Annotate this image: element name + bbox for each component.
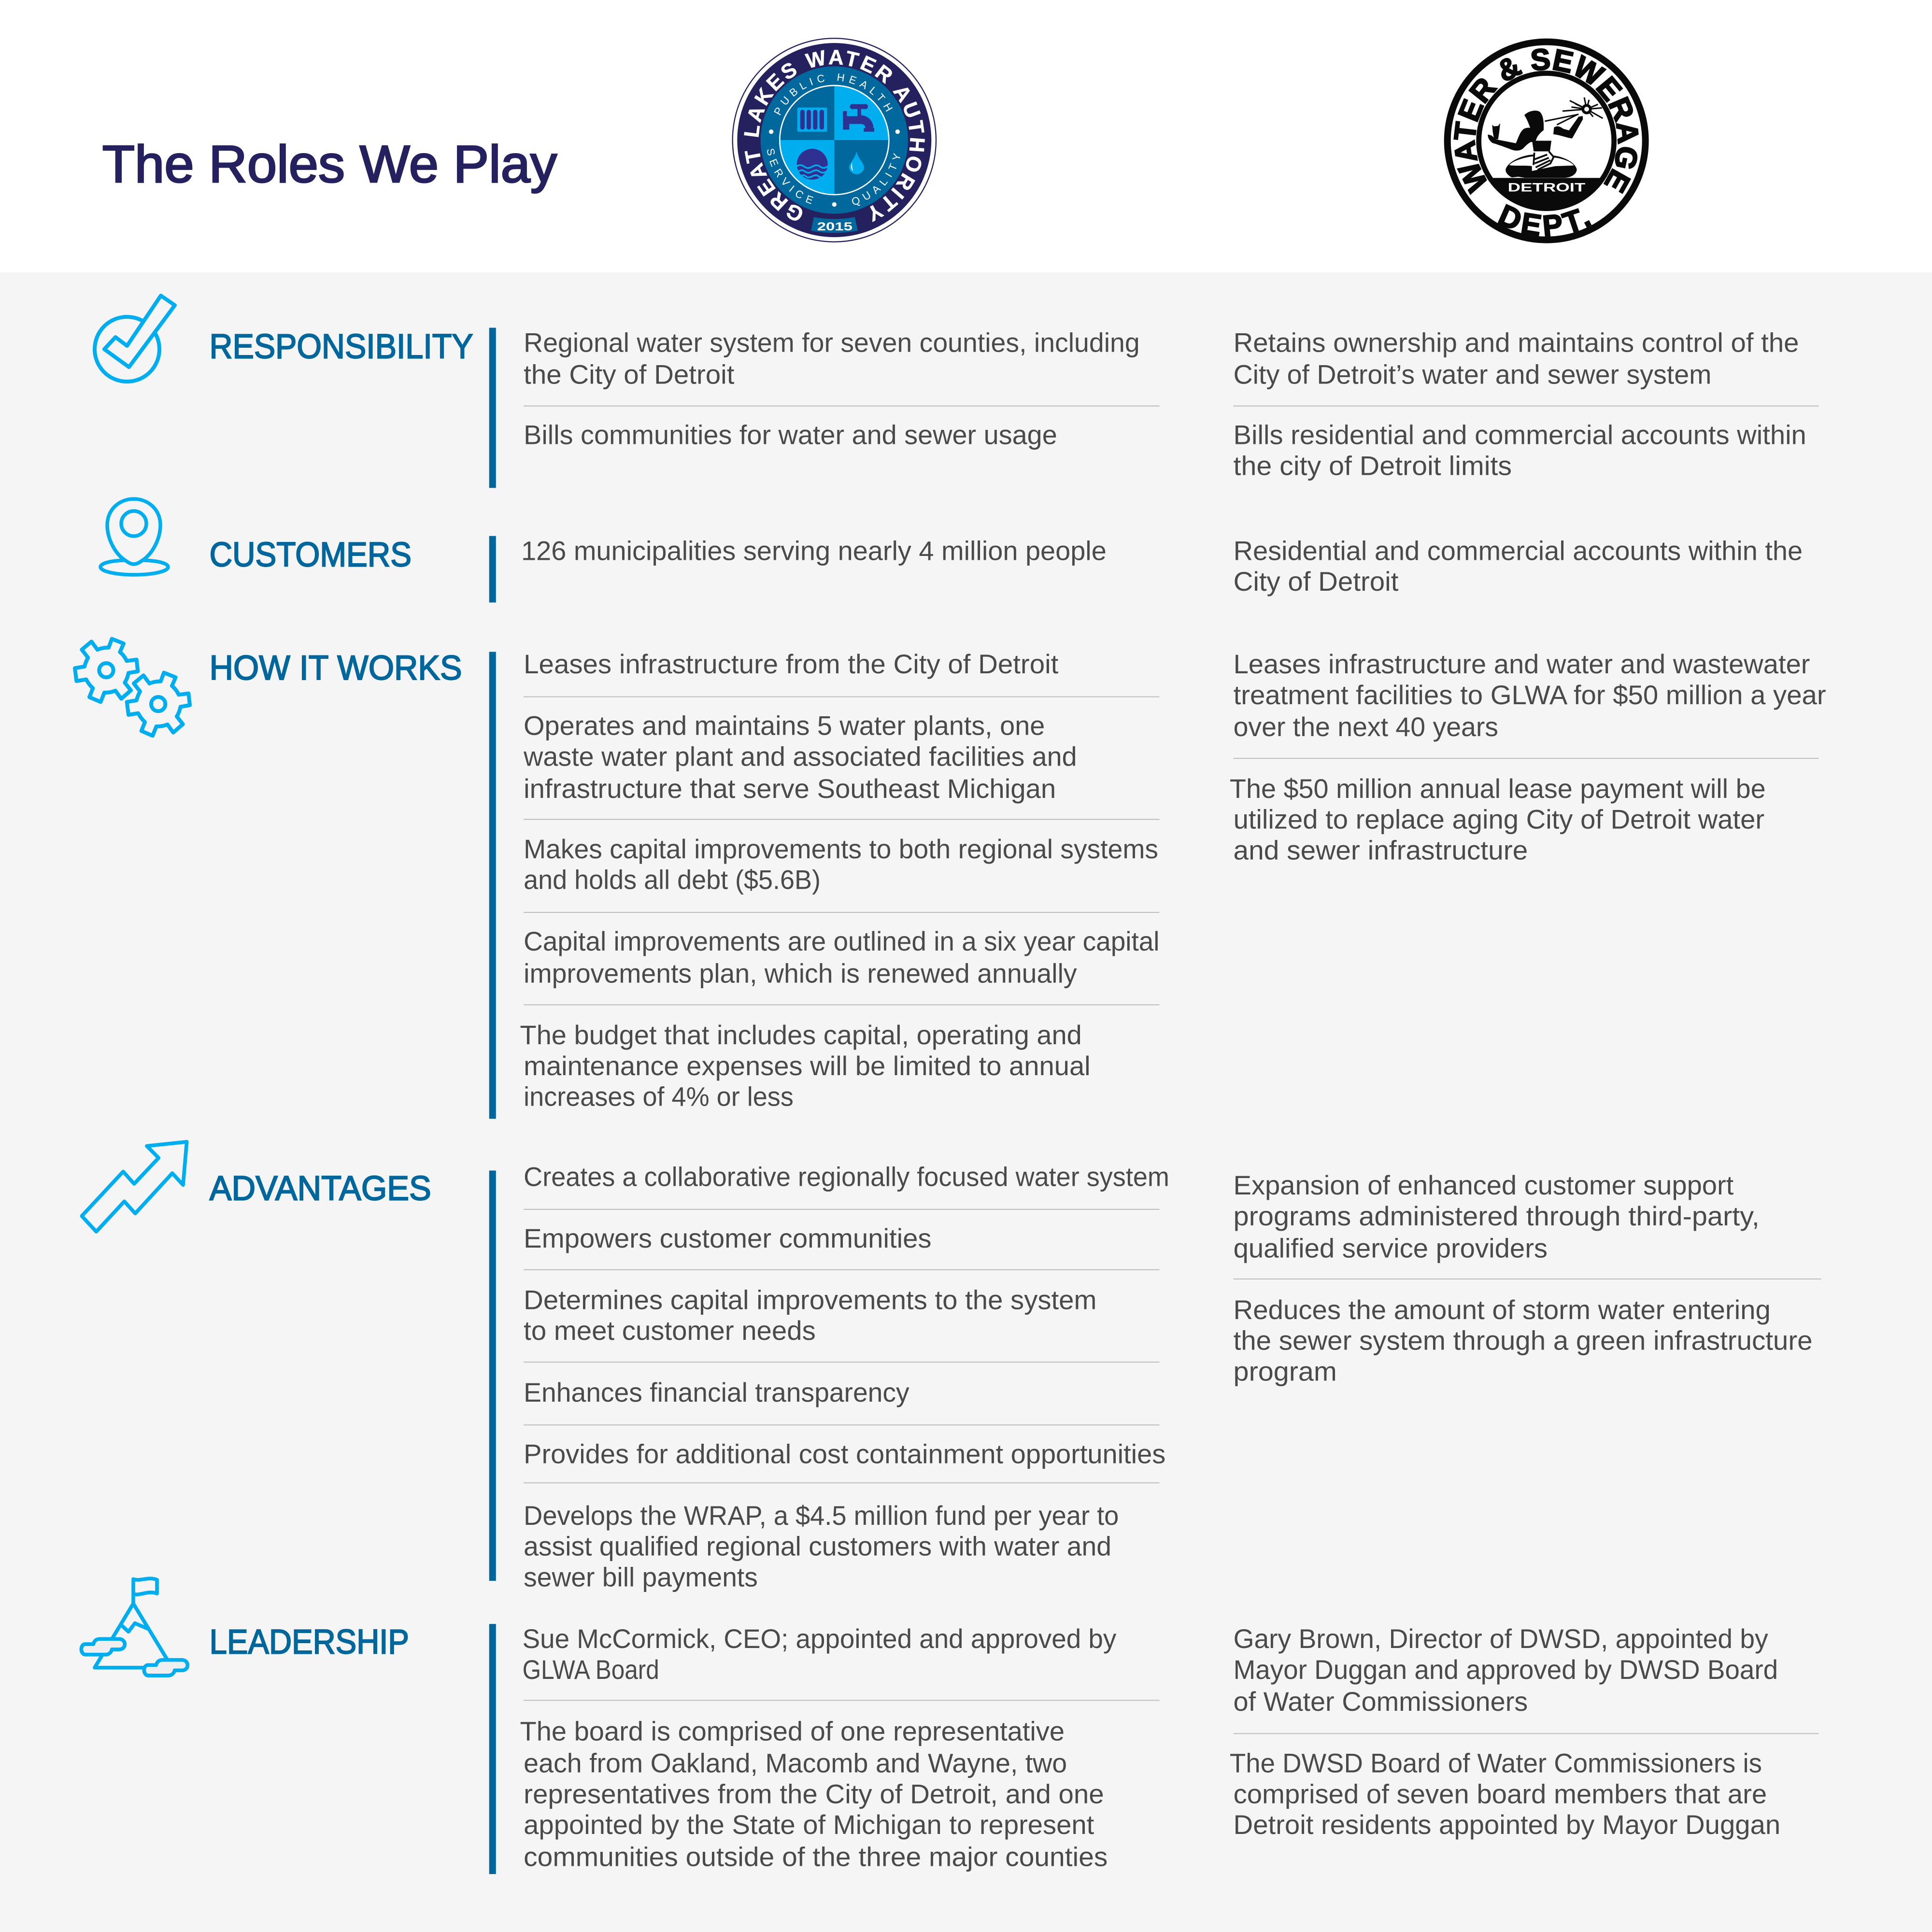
text block: how it works DWSD: over the next 40 years bbox=[1234, 712, 1498, 742]
text block: leadership GLWA: communities outside of the three major counties bbox=[524, 1842, 1108, 1872]
text block: advantages GLWA: sewer bill payments bbox=[524, 1562, 758, 1592]
text block: leadership DWSD: of Water Commissioners bbox=[1234, 1687, 1528, 1717]
text block: leadership GLWA: Sue McCormick, CEO; appointed and approved by bbox=[523, 1624, 1116, 1654]
text block: advantages GLWA: Develops the WRAP, a $4.5 million fund per year to bbox=[524, 1501, 1119, 1531]
text block: advantages DWSD: programs administered through third-party, bbox=[1234, 1201, 1760, 1231]
text block: how it works GLWA: waste water plant and associated facilities and bbox=[523, 741, 1077, 771]
text block: how it works DWSD: utilized to replace aging City of Detroit water bbox=[1234, 805, 1764, 835]
text block: advantages DWSD: qualified service providers bbox=[1234, 1233, 1548, 1263]
divider bar: leadership bbox=[489, 1624, 496, 1874]
text block: customers DWSD: City of Detroit bbox=[1234, 567, 1399, 597]
text block: responsibility GLWA bbox=[524, 327, 1160, 450]
text block: advantages DWSD: program bbox=[1234, 1356, 1337, 1386]
text block: how it works GLWA: maintenance expenses will be limited to annual bbox=[524, 1051, 1091, 1081]
text block: customers DWSD: Residential and commercial accounts within the bbox=[1234, 536, 1803, 566]
text block: leadership GLWA bbox=[520, 1624, 1160, 1872]
text block: how it works GLWA: Operates and maintains 5 water plants, one bbox=[524, 711, 1045, 741]
heading: how it works: HOW IT WORKS bbox=[210, 649, 462, 687]
icon: gears bbox=[75, 639, 190, 736]
text block: leadership GLWA: appointed by the State of Michigan to represent bbox=[524, 1810, 1094, 1840]
text block: advantages DWSD: Reduces the amount of storm water entering bbox=[1234, 1295, 1771, 1325]
text block: how it works GLWA: The budget that includes capital, operating and bbox=[520, 1020, 1082, 1050]
text block: leadership GLWA: each from Oakland, Macomb and Wayne, two bbox=[524, 1748, 1067, 1778]
text block: advantages DWSD bbox=[1234, 1170, 1821, 1386]
text block: responsibility GLWA: Bills communities for water and sewer usage bbox=[524, 420, 1057, 450]
text block: advantages GLWA: Empowers customer communities bbox=[524, 1223, 932, 1253]
text block: advantages DWSD: Expansion of enhanced customer support bbox=[1234, 1170, 1734, 1200]
text block: how it works GLWA bbox=[520, 649, 1160, 1112]
text block: how it works DWSD: Leases infrastructure and water and wastewater bbox=[1234, 649, 1810, 679]
text block: leadership DWSD bbox=[1230, 1624, 1818, 1840]
heading: responsibility: RESPONSIBILITY bbox=[210, 327, 473, 366]
text block: advantages GLWA bbox=[524, 1162, 1169, 1592]
text block: leadership DWSD: comprised of seven board members that are bbox=[1234, 1779, 1767, 1809]
text block: responsibility DWSD bbox=[1234, 327, 1818, 481]
text block: how it works GLWA: Makes capital improvements to both regional systems bbox=[524, 834, 1158, 864]
text block: advantages GLWA: Creates a collaborative regionally focused water system bbox=[524, 1162, 1169, 1192]
text block: advantages GLWA: Enhances financial transparency bbox=[524, 1378, 909, 1407]
logo: Great Lakes Water Authority: GREAT LAKES WATER AUTHORITY bbox=[744, 50, 925, 222]
icon: check mark in circle bbox=[95, 296, 175, 382]
icon: map pin bbox=[100, 499, 168, 575]
text block: how it works DWSD: The $50 million annual lease payment will be bbox=[1230, 774, 1766, 804]
text block: customers GLWA: 126 municipalities serving nearly 4 million people bbox=[521, 536, 1107, 566]
text block: advantages GLWA: assist qualified regional customers with water and bbox=[524, 1532, 1111, 1562]
text block: leadership DWSD: The DWSD Board of Water Commissioners is bbox=[1230, 1748, 1762, 1778]
icon: Spirit of Detroit statue bbox=[1488, 98, 1603, 178]
text block: leadership DWSD: Detroit residents appointed by Mayor Duggan bbox=[1234, 1810, 1780, 1840]
icon: rising arrow bbox=[82, 1142, 187, 1232]
text block: advantages GLWA: Determines capital improvements to the system bbox=[524, 1285, 1096, 1315]
divider bar: responsibility bbox=[489, 328, 496, 488]
text block: responsibility GLWA: the City of Detroit bbox=[524, 360, 735, 390]
logo: Detroit Water and Sewerage Department: DEPT. bbox=[1497, 204, 1592, 237]
divider bar: customers bbox=[489, 536, 496, 602]
text block: responsibility DWSD: City of Detroit’s water and sewer system bbox=[1234, 360, 1711, 390]
text block: how it works GLWA: and holds all debt ($5.6B) bbox=[524, 865, 821, 895]
logo: Great Lakes Water Authority: QUALITY bbox=[852, 153, 900, 206]
text block: leadership DWSD: Gary Brown, Director of DWSD, appointed by bbox=[1234, 1624, 1768, 1654]
logo: Great Lakes Water Authority: 2015 bbox=[817, 220, 852, 233]
text block: responsibility DWSD: Bills residential and commercial accounts within bbox=[1234, 420, 1806, 450]
text block: advantages DWSD: the sewer system through a green infrastructure bbox=[1234, 1326, 1813, 1356]
icon: mountain with flag bbox=[81, 1578, 187, 1676]
text block: leadership GLWA: representatives from the City of Detroit, and one bbox=[524, 1779, 1104, 1809]
text block: leadership DWSD: Mayor Duggan and approved by DWSD Board bbox=[1234, 1655, 1778, 1685]
text block: how it works DWSD bbox=[1230, 649, 1826, 865]
text block: responsibility DWSD: the city of Detroit limits bbox=[1234, 451, 1512, 481]
text block: how it works GLWA: increases of 4% or less bbox=[524, 1082, 794, 1112]
text block: how it works GLWA: infrastructure that serve Southeast Michigan bbox=[524, 774, 1056, 804]
logo: Great Lakes Water Authority: PUBLIC HEALTH bbox=[774, 73, 893, 115]
text block: how it works GLWA: Leases infrastructure from the City of Detroit bbox=[524, 649, 1059, 679]
text block: how it works GLWA: improvements plan, which is renewed annually bbox=[524, 958, 1077, 988]
text block: advantages GLWA: Provides for additional cost containment opportunities bbox=[524, 1439, 1165, 1469]
title: The Roles We Play bbox=[102, 135, 557, 193]
text block: responsibility GLWA: Regional water system for seven counties, including bbox=[524, 327, 1140, 357]
text block: how it works GLWA: Capital improvements are outlined in a six year capital bbox=[524, 926, 1160, 956]
text block: leadership GLWA: The board is comprised of one representative bbox=[520, 1716, 1065, 1746]
divider bar: how it works bbox=[489, 652, 496, 1119]
text block: how it works DWSD: treatment facilities to GLWA for $50 million a year bbox=[1234, 680, 1826, 710]
logo: Detroit Water and Sewerage Department: DETROIT bbox=[1508, 181, 1586, 195]
logo: Detroit Water and Sewerage Department: WATER & SEWERAGE bbox=[1453, 48, 1639, 195]
text block: advantages GLWA: to meet customer needs bbox=[524, 1316, 816, 1346]
divider bar: advantages bbox=[489, 1170, 496, 1581]
heading: leadership: LEADERSHIP bbox=[210, 1622, 409, 1661]
heading: advantages: ADVANTAGES bbox=[210, 1169, 431, 1208]
logo: Great Lakes Water Authority: SERVICE bbox=[767, 149, 813, 204]
text block: customers DWSD bbox=[1234, 536, 1803, 597]
heading: customers: CUSTOMERS bbox=[210, 535, 412, 574]
text block: how it works DWSD: and sewer infrastructure bbox=[1234, 835, 1528, 865]
text block: leadership GLWA: GLWA Board bbox=[523, 1655, 659, 1685]
text block: responsibility DWSD: Retains ownership and maintains control of the bbox=[1234, 327, 1799, 357]
